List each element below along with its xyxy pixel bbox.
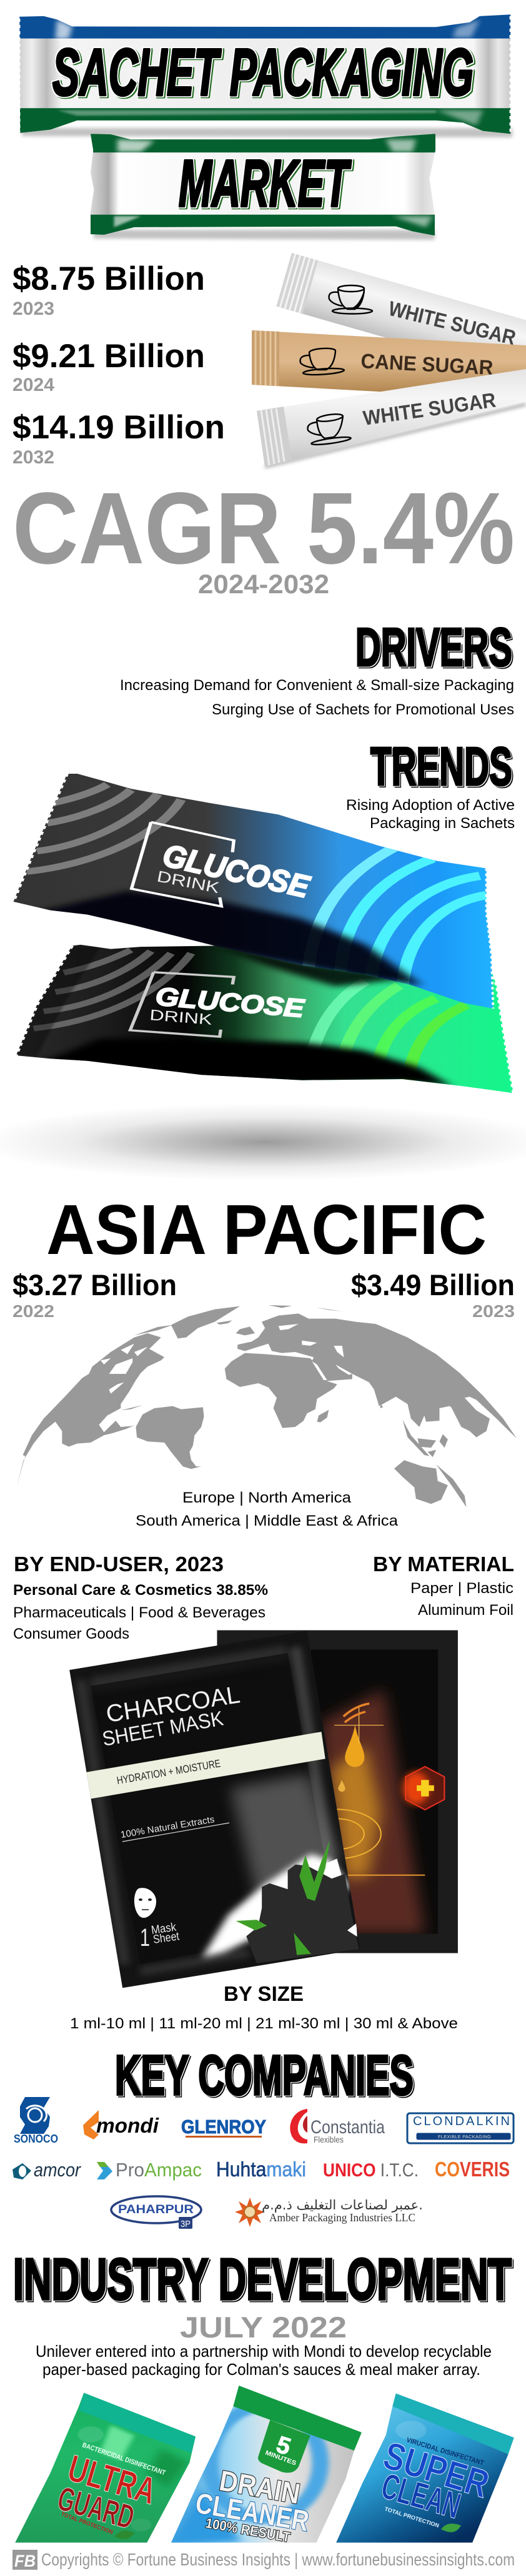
pouch: Drain Cleaner: [167, 2384, 365, 2546]
cream band: [86, 1732, 325, 1799]
value: $14.19 Billion: [12, 409, 225, 446]
logo: Amber Packaging: Amber Packaging Industries LLC: [269, 2211, 415, 2224]
segment list: Pharmaceuticals | Food & Beverages: [13, 1604, 265, 1621]
logo: Coveris: COVERIS: [435, 2158, 510, 2181]
CAGR period: 2024-2032: [198, 570, 329, 600]
logo: Amcor: amcor: [34, 2159, 81, 2181]
region value 2023: [351, 1268, 515, 1321]
text: one mask sheet: 1: [140, 1924, 150, 1952]
text: 5: [273, 2432, 294, 2460]
icon: face mask: [134, 1888, 156, 1918]
logo: Constantia: Constantia: [310, 2117, 385, 2138]
pouch: Ultra Guard: [10, 2390, 201, 2546]
year: 2024: [12, 375, 54, 395]
pack sublabel: DRINK: [156, 867, 221, 897]
pouch: Super Clean: TOTAL PROTECTION: [384, 2505, 440, 2529]
leading segment: Personal Care & Cosmetics 38.85%: [13, 1582, 268, 1599]
bar shadow: [94, 230, 435, 240]
by material section: Aluminum Foil: [418, 1602, 514, 1619]
logo: Constantia: Flexibles: [314, 2134, 344, 2144]
text: natural extracts: 100% Natural Extracts: [120, 1814, 216, 1840]
year: 2032: [12, 447, 54, 468]
pouch: Super Clean: [332, 2390, 520, 2546]
green glucose drink pack: [0, 942, 526, 1097]
pouch: Drain Cleaner: DRAIN: [217, 2464, 302, 2510]
other regions: South America | Middle East & Africa: [136, 1513, 399, 1529]
golden drop: [345, 1725, 364, 1767]
heading: BY SIZE: [224, 1982, 304, 2005]
zigzag seams: [19, 16, 510, 134]
pack sublabel: DRINK: [149, 1007, 212, 1029]
text: BACTERICIDAL DISINFECTANT: [81, 2441, 167, 2477]
development description: Unilever entered into a partnership with Mondi to develop recyclable: [36, 2342, 492, 2361]
size list: 1 ml-10 ml | 11 ml-20 ml | 21 ml-30 ml | 30 ml & Above: [70, 2015, 458, 2032]
logo: Sonoco: [14, 2097, 58, 2145]
pouch: Super Clean: CLEAN: [377, 2465, 465, 2527]
rings: [293, 1809, 381, 1858]
development description: [36, 2342, 492, 2379]
sachet: white sugar bottom: WHITE SUGAR: [362, 388, 497, 430]
trends list: Packaging in Sachets: [370, 815, 515, 832]
logo: Constantia: [290, 2109, 385, 2144]
logo: Amcor: [12, 2159, 81, 2181]
value: $8.75 Billion: [12, 260, 205, 297]
sachet: white sugar bottom: [257, 369, 526, 468]
by end-user section: [13, 1552, 268, 1642]
globe map: [17, 1305, 517, 1507]
trends list: Rising Adoption of Active: [346, 797, 515, 814]
region value 2023: 2023: [472, 1301, 515, 1321]
logo: ProAmpac: ProAmpac: [116, 2159, 202, 2181]
packet fold highlights: [91, 1653, 288, 1686]
text: charcoal: CHARCOAL: [104, 1681, 242, 1728]
bar shadow: [22, 128, 512, 137]
blue glucose drink pack: [14, 774, 495, 1009]
pack label: GLUCOSE: [154, 982, 306, 1023]
region value 2022: $3.27 Billion: [12, 1268, 177, 1301]
sachet: white sugar top: [276, 253, 526, 380]
floor shadow: [0, 1103, 526, 1181]
text: one mask sheet: Sheet: [152, 1930, 181, 1947]
pouch: Drain Cleaner: CLEANER: [193, 2487, 311, 2537]
logo: Mondi: mondi: [96, 2114, 159, 2137]
other regions: Europe | North America: [182, 1489, 352, 1506]
region heading: Asia Pacific: ASIA PACIFIC: [46, 1190, 487, 1269]
text: hydration: HYDRATION + MOISTURE: [116, 1757, 221, 1787]
text: one mask sheet: [140, 1921, 181, 1952]
logo: Amber Packaging: [235, 2198, 423, 2227]
logo frame: [132, 822, 234, 906]
text: sheet mask: SHEET MASK: [101, 1706, 225, 1750]
sachet: cane sugar: CANE SUGAR: [360, 349, 494, 379]
logo: Mondi: [83, 2110, 159, 2139]
pouch: Ultra Guard: TOTAL PROTECTION: [60, 2510, 114, 2535]
logo: Amber Packaging: عمبر لصناعات التغليف ذ.م.م.: [262, 2198, 423, 2213]
logo: Huhtamaki: Huhtamaki: [216, 2158, 306, 2181]
other regions: [136, 1489, 399, 1529]
drivers list: Increasing Demand for Convenient & Small-size Packaging: [120, 677, 514, 694]
pouch: Super Clean: SUPER: [379, 2434, 494, 2507]
pouch: Ultra Guard: GUARD: [54, 2480, 138, 2537]
sachet: cane sugar: [252, 330, 526, 400]
logo: Unico ITC: UNICO I.T.C.: [323, 2160, 419, 2181]
text: one mask sheet: Mask: [151, 1921, 177, 1937]
bamboo leaves: [299, 1840, 330, 1901]
hexagon plus: [405, 1767, 444, 1810]
title bar: Market: [87, 131, 439, 240]
text: VIRUCIDAL DISINFECTANT: [405, 2436, 485, 2467]
development date: JULY 2022: [180, 2311, 347, 2344]
region value 2023: $3.49 Billion: [351, 1268, 515, 1301]
region value 2022: [12, 1268, 177, 1321]
market value 2023: [12, 260, 205, 319]
trends list: [346, 797, 515, 832]
heading: BY END-USER, 2023: [14, 1552, 224, 1576]
region value 2022: 2022: [12, 1301, 54, 1321]
front charcoal sheet mask packet: [69, 1631, 360, 1988]
logo: Paharpur: 3P: [181, 2219, 191, 2229]
logo: Sonoco: SONOCO: [14, 2133, 58, 2145]
logo: Clondalkin: FLEXIBLE PACKAGING: [438, 2134, 491, 2139]
logo: Glenroy: GLENROY: [181, 2116, 266, 2138]
development description: paper-based packaging for Colman's sauces & meal maker array.: [42, 2360, 480, 2379]
market value 2024: [12, 338, 205, 395]
logo frame: [130, 972, 234, 1037]
drivers list: Surging Use of Sachets for Promotional Uses: [212, 701, 514, 718]
pouch: Drain Cleaner: MINUTES: [264, 2449, 297, 2467]
heading: BY MATERIAL: [373, 1552, 514, 1576]
material list: Paper | Plastic: [410, 1580, 514, 1597]
by size section: [70, 1982, 458, 2032]
pouch: Ultra Guard: ULTRA: [63, 2447, 161, 2512]
logo: Paharpur: PAHARPUR: [118, 2203, 194, 2216]
by material section: [373, 1552, 514, 1619]
value: $9.21 Billion: [12, 338, 205, 375]
logo: Clondalkin: [407, 2113, 514, 2143]
market value 2032: [12, 409, 225, 468]
back mask packet: [217, 1631, 458, 1953]
title bar: Sachet Packaging: [17, 11, 514, 137]
pouch: Drain Cleaner: 100% RESULT: [204, 2515, 292, 2545]
by end-user section: Consumer Goods: [13, 1626, 129, 1642]
year: 2023: [12, 299, 54, 319]
sugar sachets illustration: [252, 253, 526, 468]
drivers list: [120, 677, 514, 718]
footer logo: FB: [14, 2552, 36, 2570]
title text line 2: MARKET: [179, 147, 352, 220]
logo: Paharpur: [111, 2196, 201, 2229]
logo: Clondalkin: CLONDALKIN: [413, 2115, 510, 2128]
pack label: GLUCOSE: [160, 837, 314, 905]
charcoal piece: [246, 1865, 359, 1963]
